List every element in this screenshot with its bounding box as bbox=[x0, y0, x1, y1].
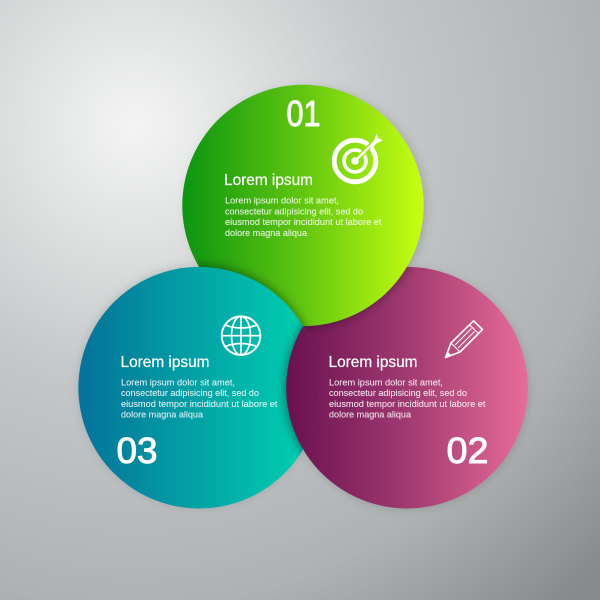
panel: 02 magenta circle bbox=[303, 266, 528, 508]
heading: 02: Lorem ipsum bbox=[328, 354, 418, 371]
text block: 02 bbox=[328, 354, 486, 421]
circle shadows on background bbox=[79, 87, 528, 509]
body: 02: eiusmod tempor incididunt ut labore et bbox=[329, 399, 486, 410]
number 01: 01 bbox=[286, 93, 320, 134]
body: 03: dolore magna aliqua bbox=[121, 410, 204, 421]
panel: 03 teal circle bbox=[78, 266, 320, 508]
icon: pencil bbox=[446, 321, 482, 358]
heading: 01: Lorem ipsum bbox=[224, 172, 313, 189]
body: 03: eiusmod tempor incididunt ut labore et bbox=[121, 399, 278, 410]
body: 02: consectetur adipisicing elit, sed do bbox=[329, 388, 467, 399]
text block: 03 bbox=[120, 354, 278, 421]
body: 01: consectetur adipisicing elit, sed do bbox=[225, 206, 363, 217]
body: 01: Lorem ipsum dolor sit amet, bbox=[225, 196, 339, 206]
number 02: 02 bbox=[446, 430, 488, 471]
body: 02: Lorem ipsum dolor sit amet, bbox=[329, 377, 443, 388]
panel: 01 green circle bbox=[182, 84, 424, 326]
body: 01: eiusmod tempor incididunt ut labore et bbox=[225, 217, 382, 228]
body: 03: Lorem ipsum dolor sit amet, bbox=[121, 377, 235, 388]
heading: 03: Lorem ipsum bbox=[120, 354, 210, 371]
text block: 01 bbox=[224, 172, 382, 239]
number 03: 03 bbox=[116, 430, 158, 471]
icon: globe bbox=[222, 316, 260, 355]
body: 03: consectetur adipisicing elit, sed do bbox=[121, 388, 259, 399]
body: 01: dolore magna aliqua bbox=[225, 228, 308, 239]
icon: target with arrow bbox=[334, 134, 383, 182]
body: 02: dolore magna aliqua bbox=[329, 410, 412, 421]
panel: magenta overlap above teal bbox=[286, 326, 320, 450]
